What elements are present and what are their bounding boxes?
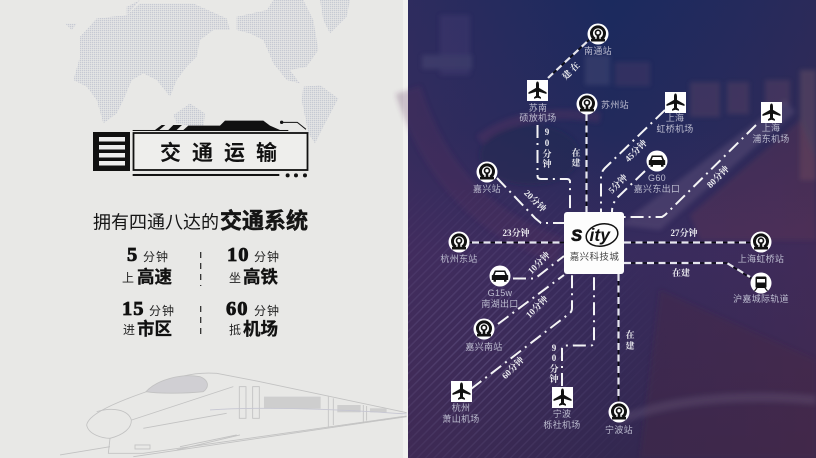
route: 栎社机场 [562, 274, 594, 386]
node: 苏州站 [576, 94, 629, 114]
stat: 10 分钟 坐高铁: 10 [227, 244, 250, 266]
label: 27分钟: 27分钟 [670, 227, 698, 238]
node: 萧山机场: 杭州 [452, 402, 470, 413]
label: 60分钟: 60分钟 [499, 354, 526, 381]
node: 南通站: 南通站 [584, 45, 612, 56]
label: 在建 南通: 在 [567, 59, 582, 74]
panel: right photo background [408, 0, 816, 458]
node: G60: G60 [648, 173, 666, 183]
node: 嘉兴南站: 嘉兴南站 [465, 341, 503, 352]
route: 宁波站 [618, 274, 620, 402]
stat: 60 分钟 抵机场: 抵 [229, 323, 241, 337]
stat: 60 分钟 抵机场: 机场 [243, 319, 278, 339]
logo: ity [590, 225, 611, 245]
node: 嘉兴站: 嘉兴站 [473, 183, 501, 194]
route: 上海虹桥站 [624, 242, 752, 244]
node: 虹桥机场: 上海 [666, 112, 684, 123]
node: 萧山机场: 萧山机场 [442, 413, 480, 424]
stat: 15 分钟 进市区: 市区 [137, 319, 172, 339]
node: 苏南硕放机场 [519, 80, 557, 123]
node: 宁波站 [605, 402, 633, 435]
stat: 10 分钟 坐高铁: 分钟 [254, 249, 280, 264]
label: 90分钟 北: 钟 [542, 158, 552, 169]
label: 90分钟 北: 0 [545, 138, 550, 148]
node: 沪嘉城际轨道 [733, 272, 789, 304]
stat: 10 分钟 坐高铁: 坐 [229, 271, 241, 285]
label: 90分钟 北 [542, 127, 552, 169]
subtitle: 拥有四通八达的交通系统 [93, 208, 308, 234]
stat: 5 分钟 上高速: 高速 [137, 267, 172, 287]
stat: 15 分钟 进市区: 15 [122, 298, 144, 320]
route: 虹桥机场 [601, 110, 665, 212]
label: 90分钟 北: 分 [542, 148, 552, 159]
route: 苏南硕放机场 [538, 125, 570, 212]
label: 20分钟: 20分钟 [522, 187, 549, 214]
heading: 交通运输 [93, 121, 308, 177]
node: 杭州东站 [440, 232, 478, 264]
hub: 嘉兴科技城: 嘉兴科技城 [570, 251, 619, 263]
node: 苏南硕放机场: 硕放机场 [519, 112, 557, 123]
label: 90分钟 北: 9 [545, 127, 550, 137]
route: 杭州东站 [468, 242, 564, 244]
label: 在建 南通: 建 [559, 67, 574, 82]
label: 90分钟 南 [549, 343, 559, 384]
label: 在建 宁波: 在 [625, 329, 635, 340]
node: G15w: G15w [488, 288, 513, 298]
node: G15w: 南湖出口 [481, 298, 519, 309]
node: 浦东机场: 浦东机场 [752, 133, 790, 144]
heading box [134, 133, 308, 170]
node: G60 [634, 150, 680, 194]
node: G60: 嘉兴东出口 [634, 183, 680, 194]
stat: 5 分钟 上高速 [122, 244, 172, 287]
route: G15w [513, 256, 564, 278]
route: 嘉兴南站 [498, 275, 564, 324]
stat: 10 分钟 坐高铁 [227, 244, 280, 287]
hub: 嘉兴科技城 [564, 212, 624, 274]
label: 90分钟 南: 分 [549, 363, 559, 374]
route: 萧山机场 [471, 274, 572, 389]
label: 90分钟 南: 0 [552, 353, 557, 363]
label: 在建 宁波: 建 [625, 340, 635, 351]
world dot map [65, 0, 350, 143]
logo [571, 221, 620, 249]
node: 嘉兴南站 [465, 318, 503, 352]
route: 南通站 [548, 39, 590, 78]
panel: left background [0, 0, 408, 458]
label: 在建 南通 [559, 59, 582, 82]
label: 在建 宁波 [625, 329, 635, 351]
stat: 15 分钟 进市区: 分钟 [149, 303, 175, 318]
label: 在建 苏州 [571, 147, 581, 168]
node: 上海虹桥站 [738, 232, 784, 264]
node: 杭州东站: 杭州东站 [440, 253, 478, 264]
node: 沪嘉城际轨道: 沪嘉城际轨道 [733, 293, 789, 304]
stat: 60 分钟 抵机场: 分钟 [254, 303, 280, 318]
label: 10分钟 上: 10分钟 [525, 249, 552, 276]
stat: 5 分钟 上高速: 5 [127, 244, 138, 266]
node: 宁波栎社机场: 宁波 [553, 408, 571, 419]
node: 宁波栎社机场 [543, 387, 581, 430]
route: 嘉兴站 [497, 178, 564, 223]
node: 苏南硕放机场: 苏南 [529, 102, 547, 113]
label: 90分钟 南: 9 [552, 343, 557, 353]
label: 在建 苏州: 建 [571, 157, 581, 168]
node: 浦东机场 [752, 102, 790, 144]
node: 嘉兴站 [473, 162, 501, 194]
route: 浦东机场 [624, 125, 756, 217]
stat: 5 分钟 上高速: 上 [122, 271, 134, 285]
route time labels [499, 59, 731, 384]
label: 5分钟: 5分钟 [606, 172, 629, 195]
node: G15w [481, 266, 519, 309]
node: 宁波栎社机场: 栎社机场 [543, 419, 581, 430]
stat: 5 分钟 上高速: 分钟 [143, 249, 169, 264]
label: 23分钟: 23分钟 [502, 227, 530, 238]
illustration: high-speed train [60, 373, 407, 457]
stat: 60 分钟 抵机场 [226, 298, 280, 339]
node: 南通站 [584, 24, 612, 56]
stat: 15 分钟 进市区: 进 [123, 323, 135, 337]
route: G60 [612, 171, 645, 212]
heading icon [93, 132, 130, 171]
node: 虹桥机场 [656, 92, 694, 134]
label: 10分钟 下: 10分钟 [523, 293, 550, 320]
node: 上海虹桥站: 上海虹桥站 [738, 253, 784, 264]
stat: 60 分钟 抵机场: 60 [226, 298, 248, 320]
label: 80分钟: 80分钟 [704, 163, 731, 190]
node: 苏州站: 苏州站 [601, 99, 629, 110]
node: 浦东机场: 上海 [762, 122, 780, 133]
label: 在建 苏州: 在 [571, 147, 581, 158]
label: 45分钟: 45分钟 [622, 137, 649, 164]
label: 90分钟 南: 钟 [549, 373, 559, 384]
connector lines [468, 39, 756, 402]
stat: 10 分钟 坐高铁: 高铁 [243, 267, 278, 287]
stat: 15 分钟 进市区 [122, 298, 175, 339]
logo: s [571, 223, 583, 246]
node: 萧山机场 [442, 381, 480, 424]
route: 沪嘉城际轨道 [624, 263, 752, 279]
route: 苏州站 [586, 114, 588, 212]
heading decoration [133, 121, 307, 177]
heading text: 交通运输 [160, 141, 288, 165]
node: 虹桥机场: 虹桥机场 [656, 123, 694, 134]
node: 宁波站: 宁波站 [605, 424, 633, 435]
label: 在建 沪嘉: 在建 [672, 267, 690, 278]
